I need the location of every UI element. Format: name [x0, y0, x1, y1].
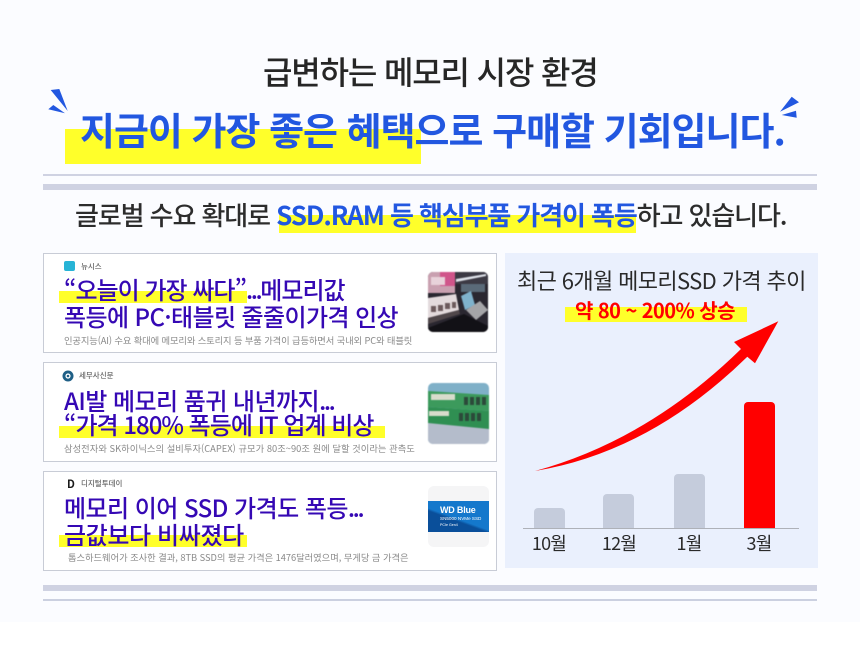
icon: press logo	[62, 370, 74, 382]
headline line 2: “가격 180% 폭등에 IT 업계 비상	[64, 406, 373, 441]
press name: 세무사신문	[79, 370, 114, 381]
subheading: 글로벌 수요 확대로 SSD.RAM 등 핵심부품 가격이 폭등하고 있습니다.	[75, 196, 786, 233]
headline: AI발 메모리 품귀 내년까지...	[64, 382, 333, 417]
model text: SN5000 NVMe SSD	[440, 516, 481, 521]
baseline	[523, 528, 799, 529]
panel: news card 1	[43, 253, 497, 353]
title: market environment: 급변하는 메모리 시장 환경	[263, 48, 598, 94]
press name: 뉴시스	[81, 261, 102, 272]
headline highlight	[65, 129, 421, 164]
highlight	[59, 535, 247, 547]
label: December: 12월	[602, 530, 636, 556]
interface text: PCIe Gen4	[440, 523, 458, 527]
chart title: 최근 6개월 메모리SSD 가격 추이	[517, 264, 806, 296]
summary: 삼성전자와 SK하이닉스의 설비투자(CAPEX) 규모가 80조~90조 원에 달할 것이라는 관측도	[64, 441, 415, 455]
bar: March	[744, 402, 775, 528]
thumbnail: RAM modules	[427, 382, 490, 444]
headline line 2: 폭등에 PC·태블릿 줄줄이가격 인상	[64, 298, 398, 333]
thumbnail: electronics store	[427, 271, 489, 333]
headline line 2: 금값보다 비싸졌다	[64, 516, 244, 551]
subheading highlight	[279, 215, 636, 233]
bar: December	[603, 494, 634, 528]
highlight	[59, 426, 385, 438]
press name: 디지털투데이	[81, 478, 122, 489]
arrow: rising price trend	[535, 321, 778, 471]
callout: 약 80 ~ 200% 상승	[575, 295, 735, 324]
thumbnail: WD Blue SSD	[428, 486, 489, 547]
summary: 톰스하드웨어가 조사한 결과, 8TB SSD의 평균 가격은 1476달러였으며, 무게당 금 가격은	[68, 550, 409, 564]
headline: 지금이 가장 좋은 혜택으로 구매할 기회입니다.	[80, 101, 785, 156]
label: March: 3월	[747, 530, 771, 556]
icon: left spark	[48, 89, 68, 114]
brand text: WD Blue	[440, 505, 476, 515]
panel: price trend chart	[505, 253, 818, 568]
summary: 인공지능(AI) 수요 확대에 메모리와 스토리지 등 부품 가격이 급등하면서 국내외 PC와 태블릿	[64, 333, 412, 347]
icon: right spark	[780, 96, 799, 118]
callout highlight	[565, 307, 747, 322]
bar: October	[534, 508, 565, 528]
headline: “오늘이 가장 싸다”...메모리값	[64, 271, 345, 306]
icon: newsis logo	[64, 261, 75, 271]
label: January: 1월	[677, 530, 701, 556]
headline: 메모리 이어 SSD 가격도 폭등...	[64, 489, 362, 524]
panel: news card 2	[43, 362, 497, 462]
label: October: 10월	[532, 530, 566, 556]
highlight	[59, 291, 247, 303]
bar: January	[674, 474, 705, 528]
panel: news card 3	[43, 471, 497, 571]
icon: press logo: D	[67, 476, 75, 492]
SSD label	[428, 501, 489, 532]
